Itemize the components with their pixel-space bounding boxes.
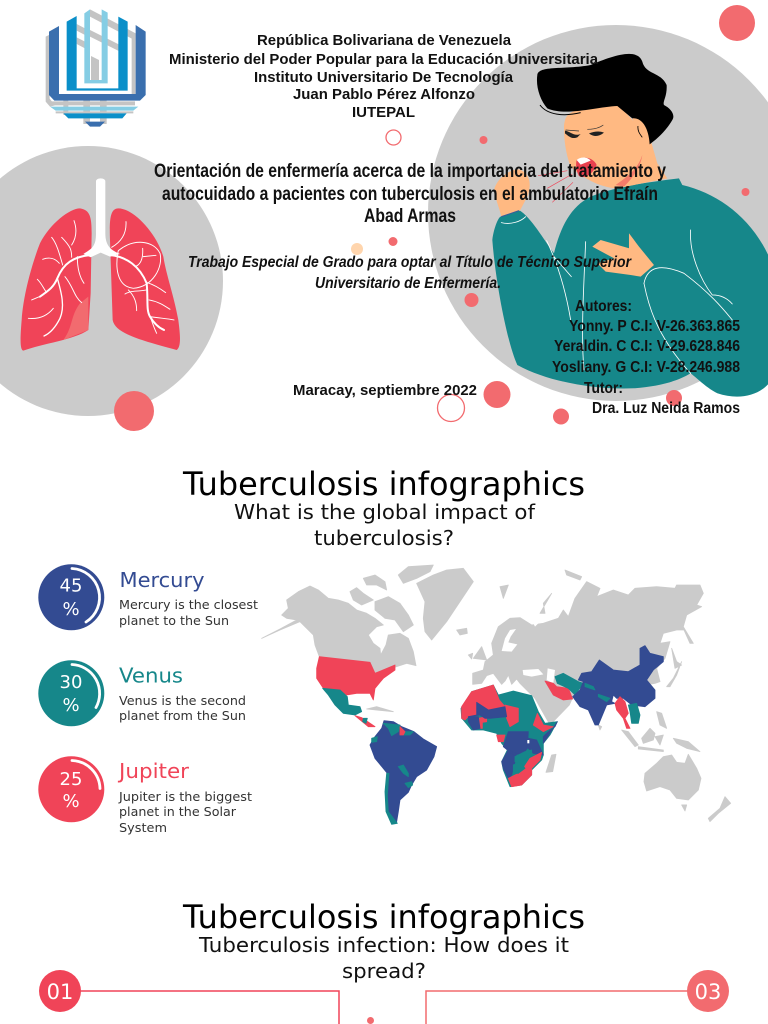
stat: Jupiter: 25 xyxy=(60,769,82,790)
decorative dot over sweater xyxy=(666,390,682,406)
stat: Mercury: planet to the Sun xyxy=(119,613,229,628)
stat: Jupiter: Jupiter is the biggest xyxy=(118,789,252,804)
thesis subtitle xyxy=(188,254,632,292)
step 01: 01 xyxy=(47,980,73,1004)
stat: Venus: Venus is the second xyxy=(119,693,246,708)
stat: Jupiter: System xyxy=(119,820,167,835)
thesis subtitle: Trabajo Especial de Grado para optar al Título de Técnico Superior xyxy=(188,254,632,271)
institution header text xyxy=(169,33,599,121)
authors: Yeraldin. C C.I: V-29.628.846 xyxy=(554,338,740,355)
authors: Autores: xyxy=(575,298,632,315)
centre dot xyxy=(367,1017,374,1024)
logo xyxy=(46,9,146,127)
illustration: coughing person xyxy=(492,54,768,397)
thesis subtitle: Universitario de Enfermería. xyxy=(315,275,501,292)
authors: Dra. Luz Neida Ramos xyxy=(592,400,740,417)
institution header text: IUTEPAL xyxy=(352,105,415,121)
authors: Tutor: xyxy=(584,380,623,397)
world map xyxy=(262,565,731,824)
institution header text: Instituto Universitario De Tecnología xyxy=(254,70,514,86)
thesis title: Abad Armas xyxy=(364,206,456,227)
stat: Jupiter: % xyxy=(62,791,80,812)
subheading: Tuberculosis infection: How does it xyxy=(198,933,569,957)
thesis title: autocuidado a pacientes con tuberculosis en el ambulatorio Efraín xyxy=(162,184,658,205)
stat: Venus: Venus xyxy=(119,664,183,688)
subheading: What is the global impact of xyxy=(234,500,536,524)
thesis title: Orientación de enfermería acerca de la importancia del tratamiento y xyxy=(154,161,666,182)
subheading xyxy=(234,500,536,550)
stat: Jupiter: Jupiter xyxy=(117,759,190,783)
map: Africa xyxy=(461,685,557,787)
map: Americas xyxy=(262,565,473,824)
place and date: Maracay, septiembre 2022 xyxy=(293,383,477,399)
authors xyxy=(552,298,740,417)
grey circle behind lungs xyxy=(0,146,223,416)
subheading: spread? xyxy=(342,959,426,983)
icon: lungs xyxy=(21,178,180,351)
stat: Mercury: Mercury xyxy=(120,568,205,592)
stat: Venus: planet from the Sun xyxy=(119,708,246,723)
step 03: 03 xyxy=(695,980,721,1004)
institution header text: República Bolivariana de Venezuela xyxy=(257,33,512,49)
spread section xyxy=(39,898,729,1024)
stat: Mercury: 45 xyxy=(60,576,82,596)
institution header text: Juan Pablo Pérez Alfonzo xyxy=(293,87,475,103)
stat: Venus: % xyxy=(62,695,80,716)
step 03 xyxy=(426,970,729,1024)
stat: Mercury: Mercury is the closest xyxy=(119,597,258,612)
decorative dots xyxy=(114,5,755,431)
authors: Yonny. P C.I: V-26.363.865 xyxy=(569,318,740,335)
stat: Mercury: % xyxy=(62,599,80,620)
cover section xyxy=(0,5,768,431)
stat: Mercury xyxy=(38,564,258,630)
authors: Yosliany. G C.I: V-28.246.988 xyxy=(552,359,740,376)
heading: Tuberculosis infographics xyxy=(182,465,585,503)
stat: Venus xyxy=(38,660,246,726)
global impact section xyxy=(38,465,731,835)
heading: Tuberculosis infographics xyxy=(182,898,585,936)
subheading: tuberculosis? xyxy=(314,526,454,550)
map: Eurasia and Oceania xyxy=(468,570,731,822)
step 01 xyxy=(39,970,339,1024)
stat: Venus: 30 xyxy=(60,672,82,693)
subheading xyxy=(198,933,569,983)
thesis title xyxy=(154,161,666,227)
institution header text: Ministerio del Poder Popular para la Educación Universitaria xyxy=(169,52,599,68)
grey circle behind person xyxy=(428,25,768,401)
stat: Jupiter xyxy=(38,756,252,835)
stat: Jupiter: planet in the Solar xyxy=(119,804,237,819)
